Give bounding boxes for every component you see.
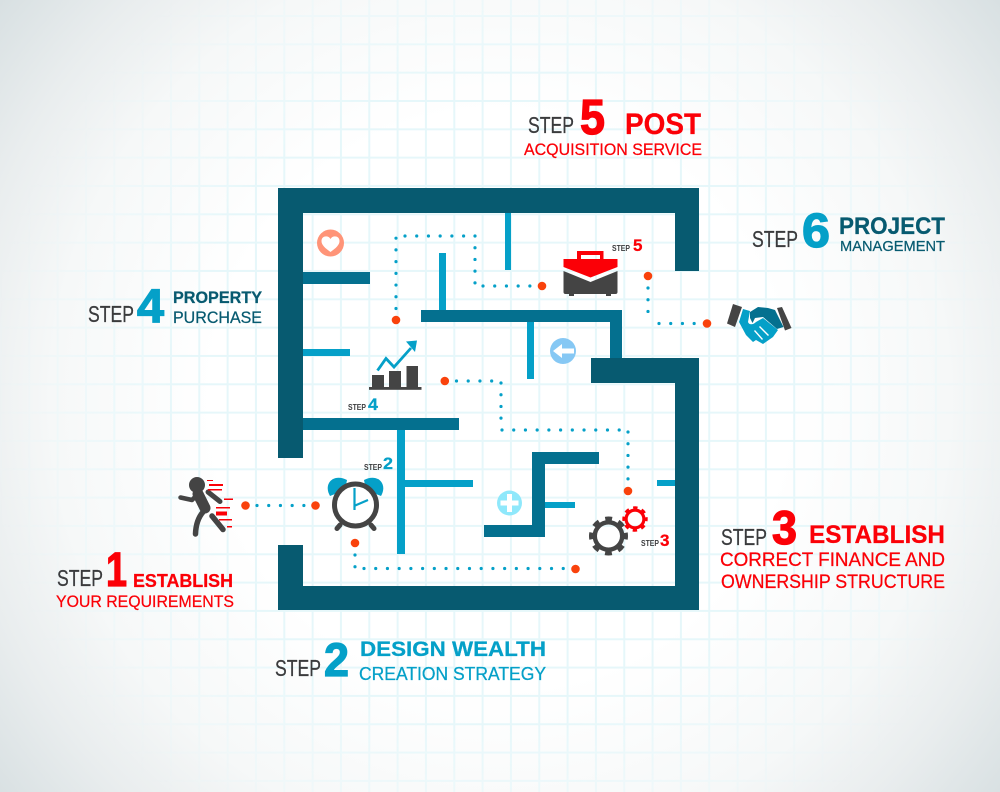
heading: step 5 post acquisition service: ACQUISITION SERVICE xyxy=(524,140,702,159)
small label: step 4 xyxy=(348,395,379,414)
heading: step 3 establish correct finance and ownership structure: OWNERSHIP STRUCTURE xyxy=(721,572,945,593)
icon: heart xyxy=(317,230,344,256)
heading: step 6 project management xyxy=(752,205,945,258)
icon: handshake xyxy=(727,304,792,344)
small label: step 5: STEP xyxy=(612,244,631,253)
dotted route xyxy=(257,236,696,568)
route markers xyxy=(241,272,711,573)
small label: step 2: 2 xyxy=(383,454,393,473)
small label: step 4: 4 xyxy=(368,395,379,414)
small label: step 2 xyxy=(364,454,393,473)
heading: step 6 project management: PROJECT xyxy=(839,213,945,240)
small label: step 3: 3 xyxy=(660,531,670,550)
inner walls xyxy=(303,272,622,537)
heading: step 2 design wealth creation strategy: DESIGN WEALTH xyxy=(360,638,546,661)
heading: step 4 property purchase xyxy=(88,279,262,332)
icon: plus xyxy=(497,490,522,516)
icon: briefcase xyxy=(564,251,618,296)
heading: step 5 post acquisition service: STEP xyxy=(528,112,574,138)
heading: step 6 project management: STEP xyxy=(752,226,798,252)
small label: step 5 xyxy=(612,236,642,255)
icon: gears xyxy=(591,508,646,553)
icon: alarm clock xyxy=(328,478,383,528)
heading: step 1 establish your requirements: 1 xyxy=(106,544,127,597)
heading: step 5 post acquisition service: 5 xyxy=(580,91,605,145)
heading: step 1 establish your requirements: STEP xyxy=(57,565,103,591)
heading: step 3 establish correct finance and ownership structure: ESTABLISH xyxy=(809,521,945,549)
small label: step 5: 5 xyxy=(633,236,642,255)
red gear xyxy=(624,508,646,530)
heading: step 4 property purchase: 4 xyxy=(137,279,164,332)
icon: running figure xyxy=(180,477,233,534)
heading: step 1 establish your requirements xyxy=(56,544,234,611)
heading: step 4 property purchase: STEP xyxy=(88,301,134,327)
small step labels on the maze xyxy=(348,236,670,550)
outer walls lower section xyxy=(278,358,699,610)
heading: step 2 design wealth creation strategy xyxy=(275,633,546,686)
heading: step 3 establish correct finance and ownership structure: STEP xyxy=(721,524,767,550)
heading: step 2 design wealth creation strategy: STEP xyxy=(275,655,321,681)
heading: step 2 design wealth creation strategy: CREATION STRATEGY xyxy=(359,664,546,684)
heading: step 1 establish your requirements: YOUR REQUIREMENTS xyxy=(56,592,234,611)
icon: bar chart with arrow xyxy=(369,340,422,390)
light inner walls xyxy=(303,213,675,554)
small label: step 2: STEP xyxy=(364,463,383,472)
heading: step 3 establish correct finance and ownership structure: 3 xyxy=(772,501,797,554)
dark gear xyxy=(591,519,626,553)
heading: step 5 post acquisition service xyxy=(524,91,702,159)
small label: step 3 xyxy=(641,531,670,550)
heading: step 1 establish your requirements: ESTABLISH xyxy=(133,571,233,591)
small label: step 3: STEP xyxy=(641,539,660,548)
heading: step 3 establish correct finance and ownership structure: CORRECT FINANCE AND xyxy=(720,550,945,571)
heading: step 5 post acquisition service: POST xyxy=(625,108,701,141)
heading: step 4 property purchase: PURCHASE xyxy=(173,308,262,327)
icon: left arrow xyxy=(550,338,576,364)
heading: step 6 project management: MANAGEMENT xyxy=(840,238,945,255)
heading: step 4 property purchase: PROPERTY xyxy=(173,289,262,307)
heading: step 2 design wealth creation strategy: 2 xyxy=(324,633,349,686)
small label: step 4: STEP xyxy=(348,403,367,412)
heading: step 6 project management: 6 xyxy=(802,205,830,258)
heading: step 3 establish correct finance and ownership structure xyxy=(720,501,945,593)
maze walls xyxy=(278,188,699,610)
outer walls xyxy=(278,188,699,458)
